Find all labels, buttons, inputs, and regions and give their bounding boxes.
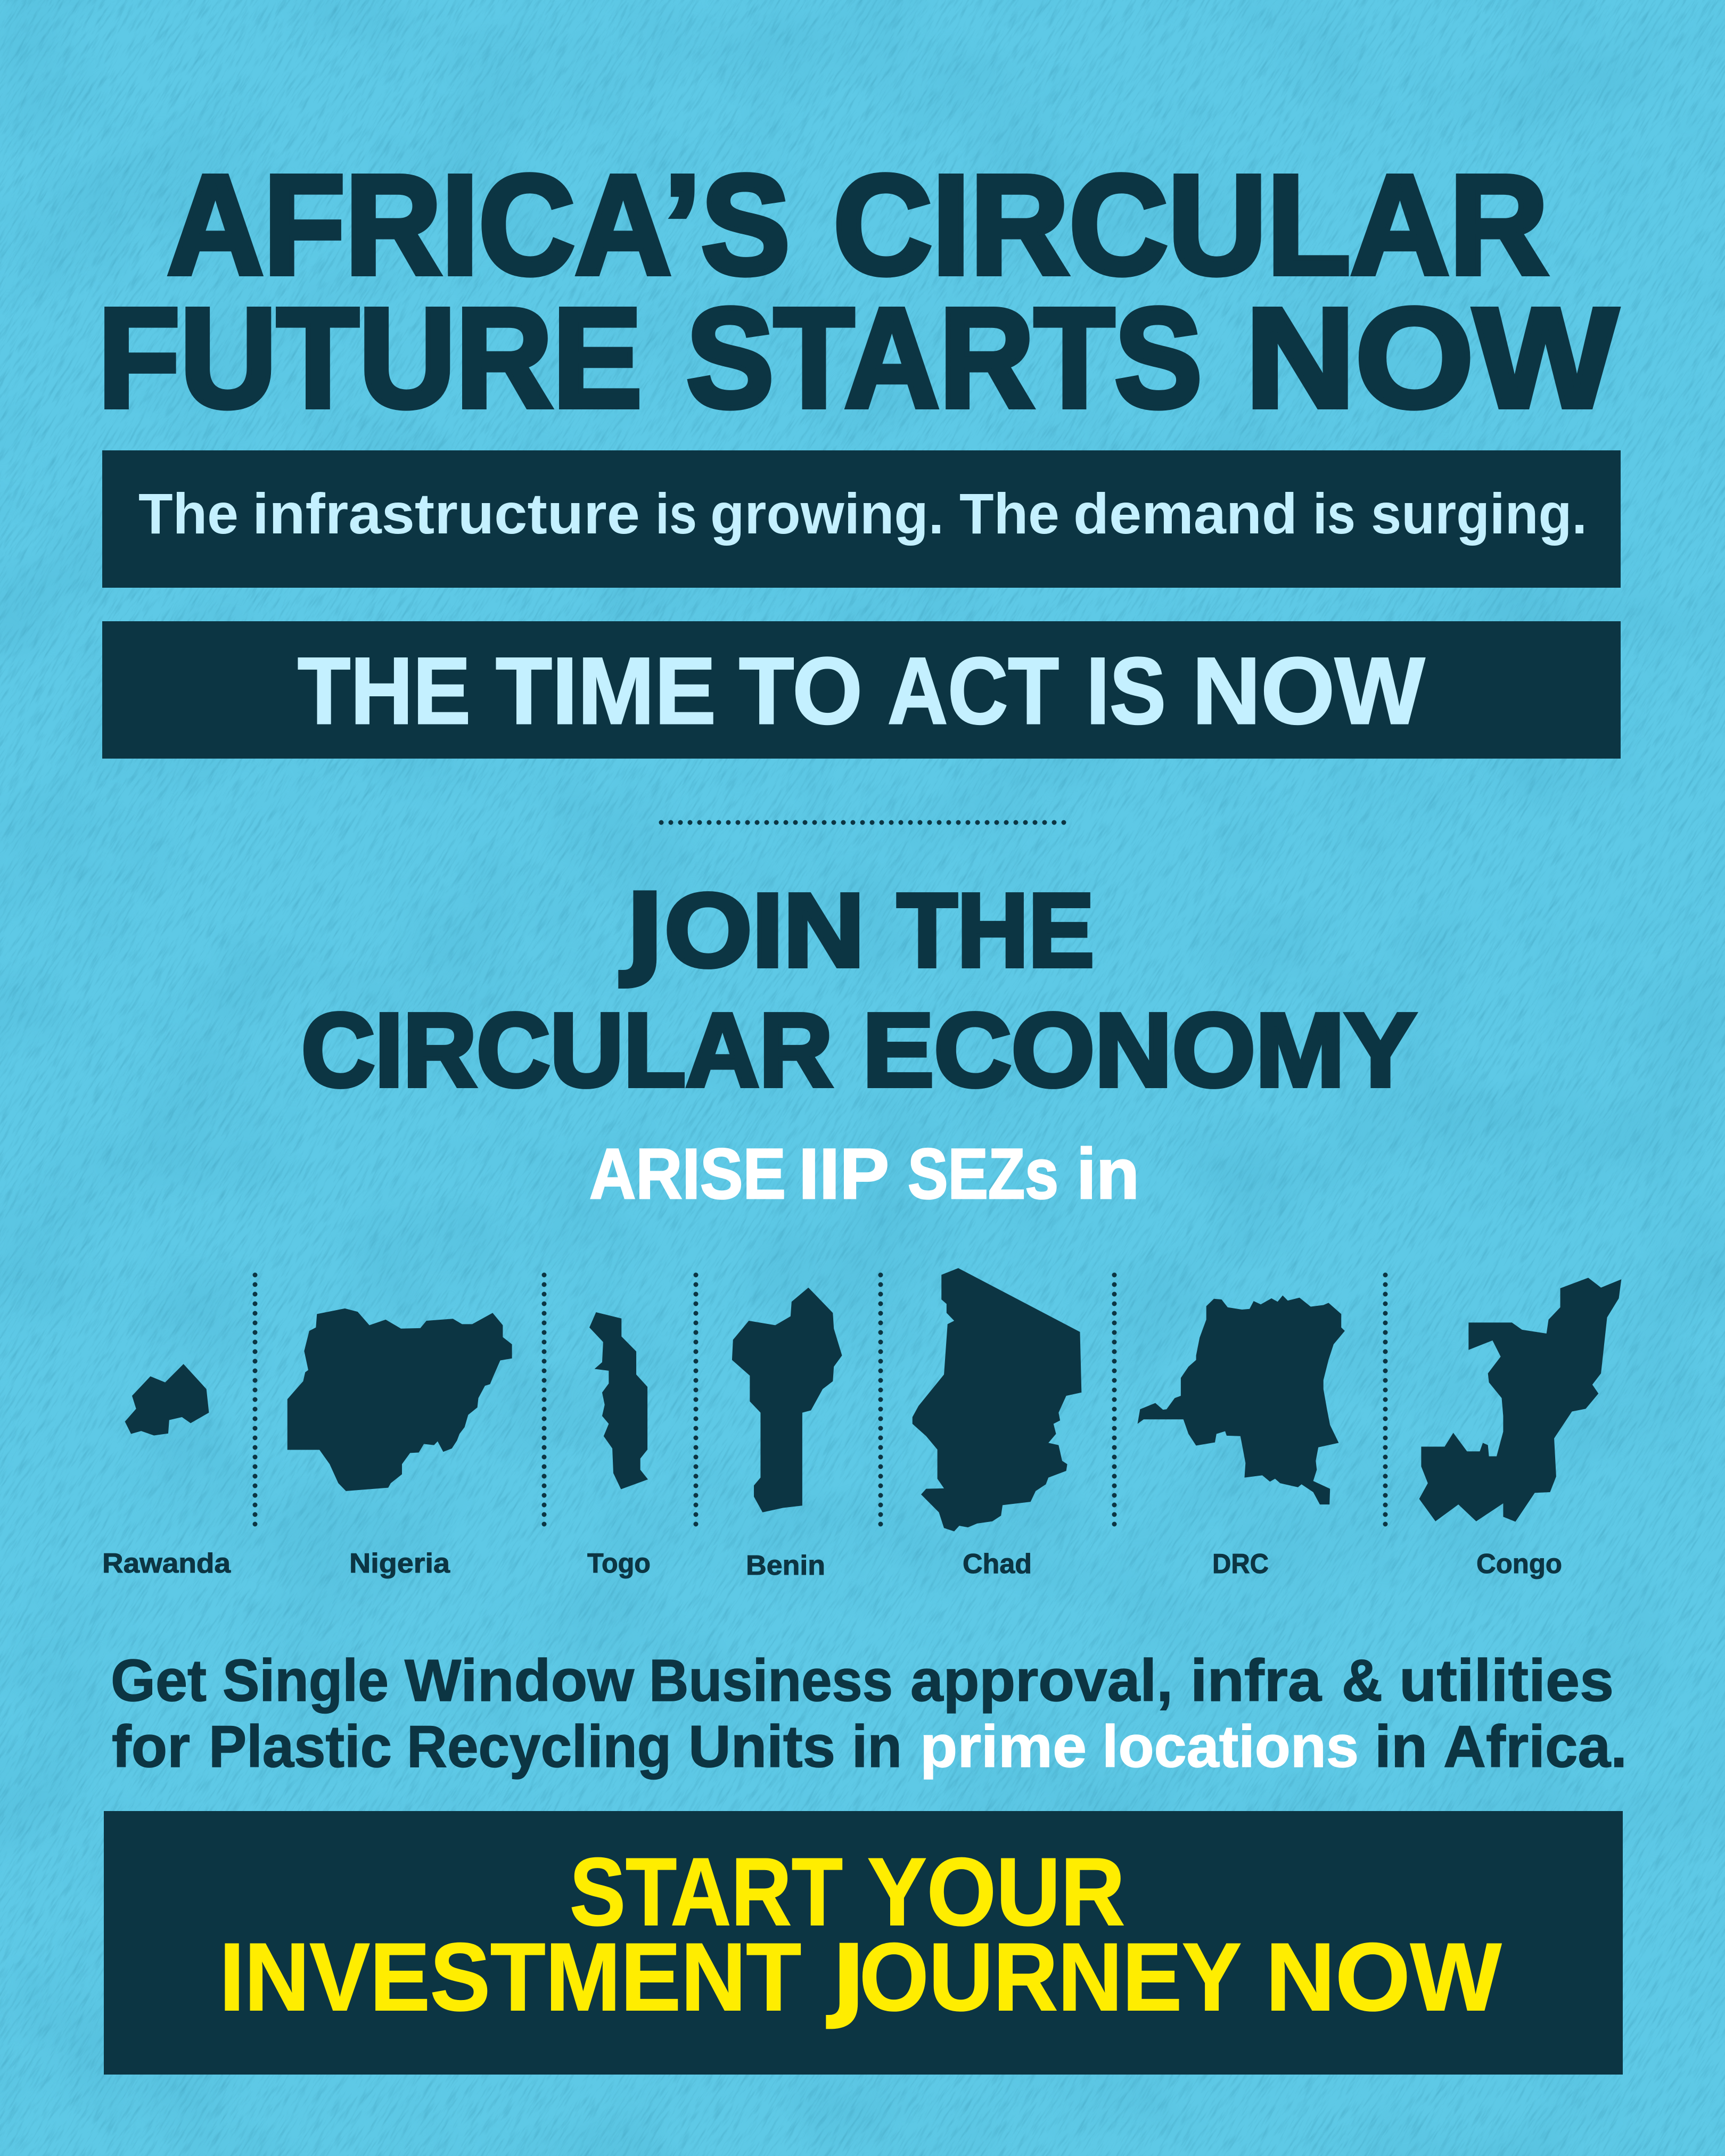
map: Nigeria xyxy=(288,1309,512,1491)
divider xyxy=(661,820,1067,825)
description text: for xyxy=(112,1714,190,1780)
subheading: in xyxy=(1077,1134,1139,1214)
call to action: YOUR xyxy=(867,1838,1125,1946)
country labels: Benin xyxy=(746,1550,825,1581)
call to action: INVESTMENT xyxy=(219,1923,801,2031)
banner: infrastructure growing: infrastructure xyxy=(252,481,640,546)
description text: Business xyxy=(649,1648,893,1714)
description text: approval, xyxy=(910,1648,1173,1714)
subheading: SEZs xyxy=(908,1134,1058,1214)
description text: Units xyxy=(688,1714,835,1780)
description text: & xyxy=(1342,1648,1383,1714)
map: Congo xyxy=(1419,1278,1621,1522)
subheading: ARISE xyxy=(589,1134,786,1214)
description text: in xyxy=(852,1714,902,1780)
call to action xyxy=(104,1811,1623,2075)
description text: locations xyxy=(1102,1714,1359,1780)
call to action: J xyxy=(826,1925,866,2032)
subheading xyxy=(589,1134,1139,1214)
country labels xyxy=(102,1548,1562,1581)
banner: time to act xyxy=(102,621,1621,759)
banner: time to act: THE xyxy=(298,638,471,744)
description text: Get xyxy=(111,1648,207,1714)
map: DRC xyxy=(1138,1295,1345,1504)
title xyxy=(98,146,1619,437)
subheading: IIP xyxy=(799,1134,889,1214)
country labels: Togo xyxy=(587,1548,651,1579)
heading: join the circular economy: OIN xyxy=(664,872,865,989)
call to action: NOW xyxy=(1266,1923,1501,2031)
heading: join the circular economy: CIRCULAR xyxy=(301,992,833,1108)
vertical dotted separators xyxy=(255,1275,1385,1527)
title: NOW xyxy=(1245,279,1619,437)
banner: infrastructure growing: The xyxy=(959,481,1059,546)
heading: join the circular economy: ECONOMY xyxy=(862,992,1416,1108)
banner: infrastructure growing: is xyxy=(655,481,697,546)
banner: infrastructure growing: surging. xyxy=(1371,481,1587,546)
title: STARTS xyxy=(686,279,1202,437)
heading: join the circular economy: THE xyxy=(897,872,1094,989)
banner: time to act: IS xyxy=(1086,638,1166,744)
title: FUTURE xyxy=(98,279,642,437)
heading: join the circular economy: J xyxy=(620,873,664,990)
title: AFRICA’S xyxy=(167,146,790,304)
description text xyxy=(111,1648,1627,1780)
map: Togo xyxy=(589,1312,648,1490)
banner: time to act: TO xyxy=(739,638,862,744)
banner: infrastructure growing xyxy=(102,450,1621,588)
country labels: DRC xyxy=(1212,1549,1269,1579)
map: Benin xyxy=(732,1288,842,1512)
description text: Single xyxy=(223,1648,389,1714)
call to action: OURNEY xyxy=(859,1923,1242,2031)
description text: Plastic xyxy=(209,1714,392,1780)
map: Chad xyxy=(913,1268,1081,1532)
country labels: Nigeria xyxy=(349,1548,450,1579)
country labels: Chad xyxy=(963,1549,1032,1579)
description text: Africa. xyxy=(1443,1714,1627,1780)
heading: join the circular economy xyxy=(301,872,1416,1108)
map: Rwanda xyxy=(125,1364,209,1436)
description text: prime xyxy=(920,1714,1087,1780)
description text: infra xyxy=(1190,1648,1322,1714)
call to action: START xyxy=(570,1838,843,1946)
map row: countries xyxy=(125,1268,1621,1532)
banner: infrastructure growing: demand xyxy=(1073,481,1297,546)
description text: Recycling xyxy=(407,1714,671,1780)
description text: utilities xyxy=(1399,1648,1614,1714)
country labels: Congo xyxy=(1476,1549,1562,1579)
banner: time to act: TIME xyxy=(496,638,716,744)
banner: infrastructure growing: growing. xyxy=(710,481,944,546)
banner: infrastructure growing: The xyxy=(138,481,239,546)
title: CIRCULAR xyxy=(833,146,1548,304)
banner: time to act: NOW xyxy=(1192,638,1425,744)
description text: in xyxy=(1375,1714,1427,1780)
country labels: Rawanda xyxy=(102,1548,231,1579)
banner: infrastructure growing: is xyxy=(1313,481,1356,546)
description text: Window xyxy=(405,1648,635,1714)
banner: time to act: ACT xyxy=(888,638,1059,744)
